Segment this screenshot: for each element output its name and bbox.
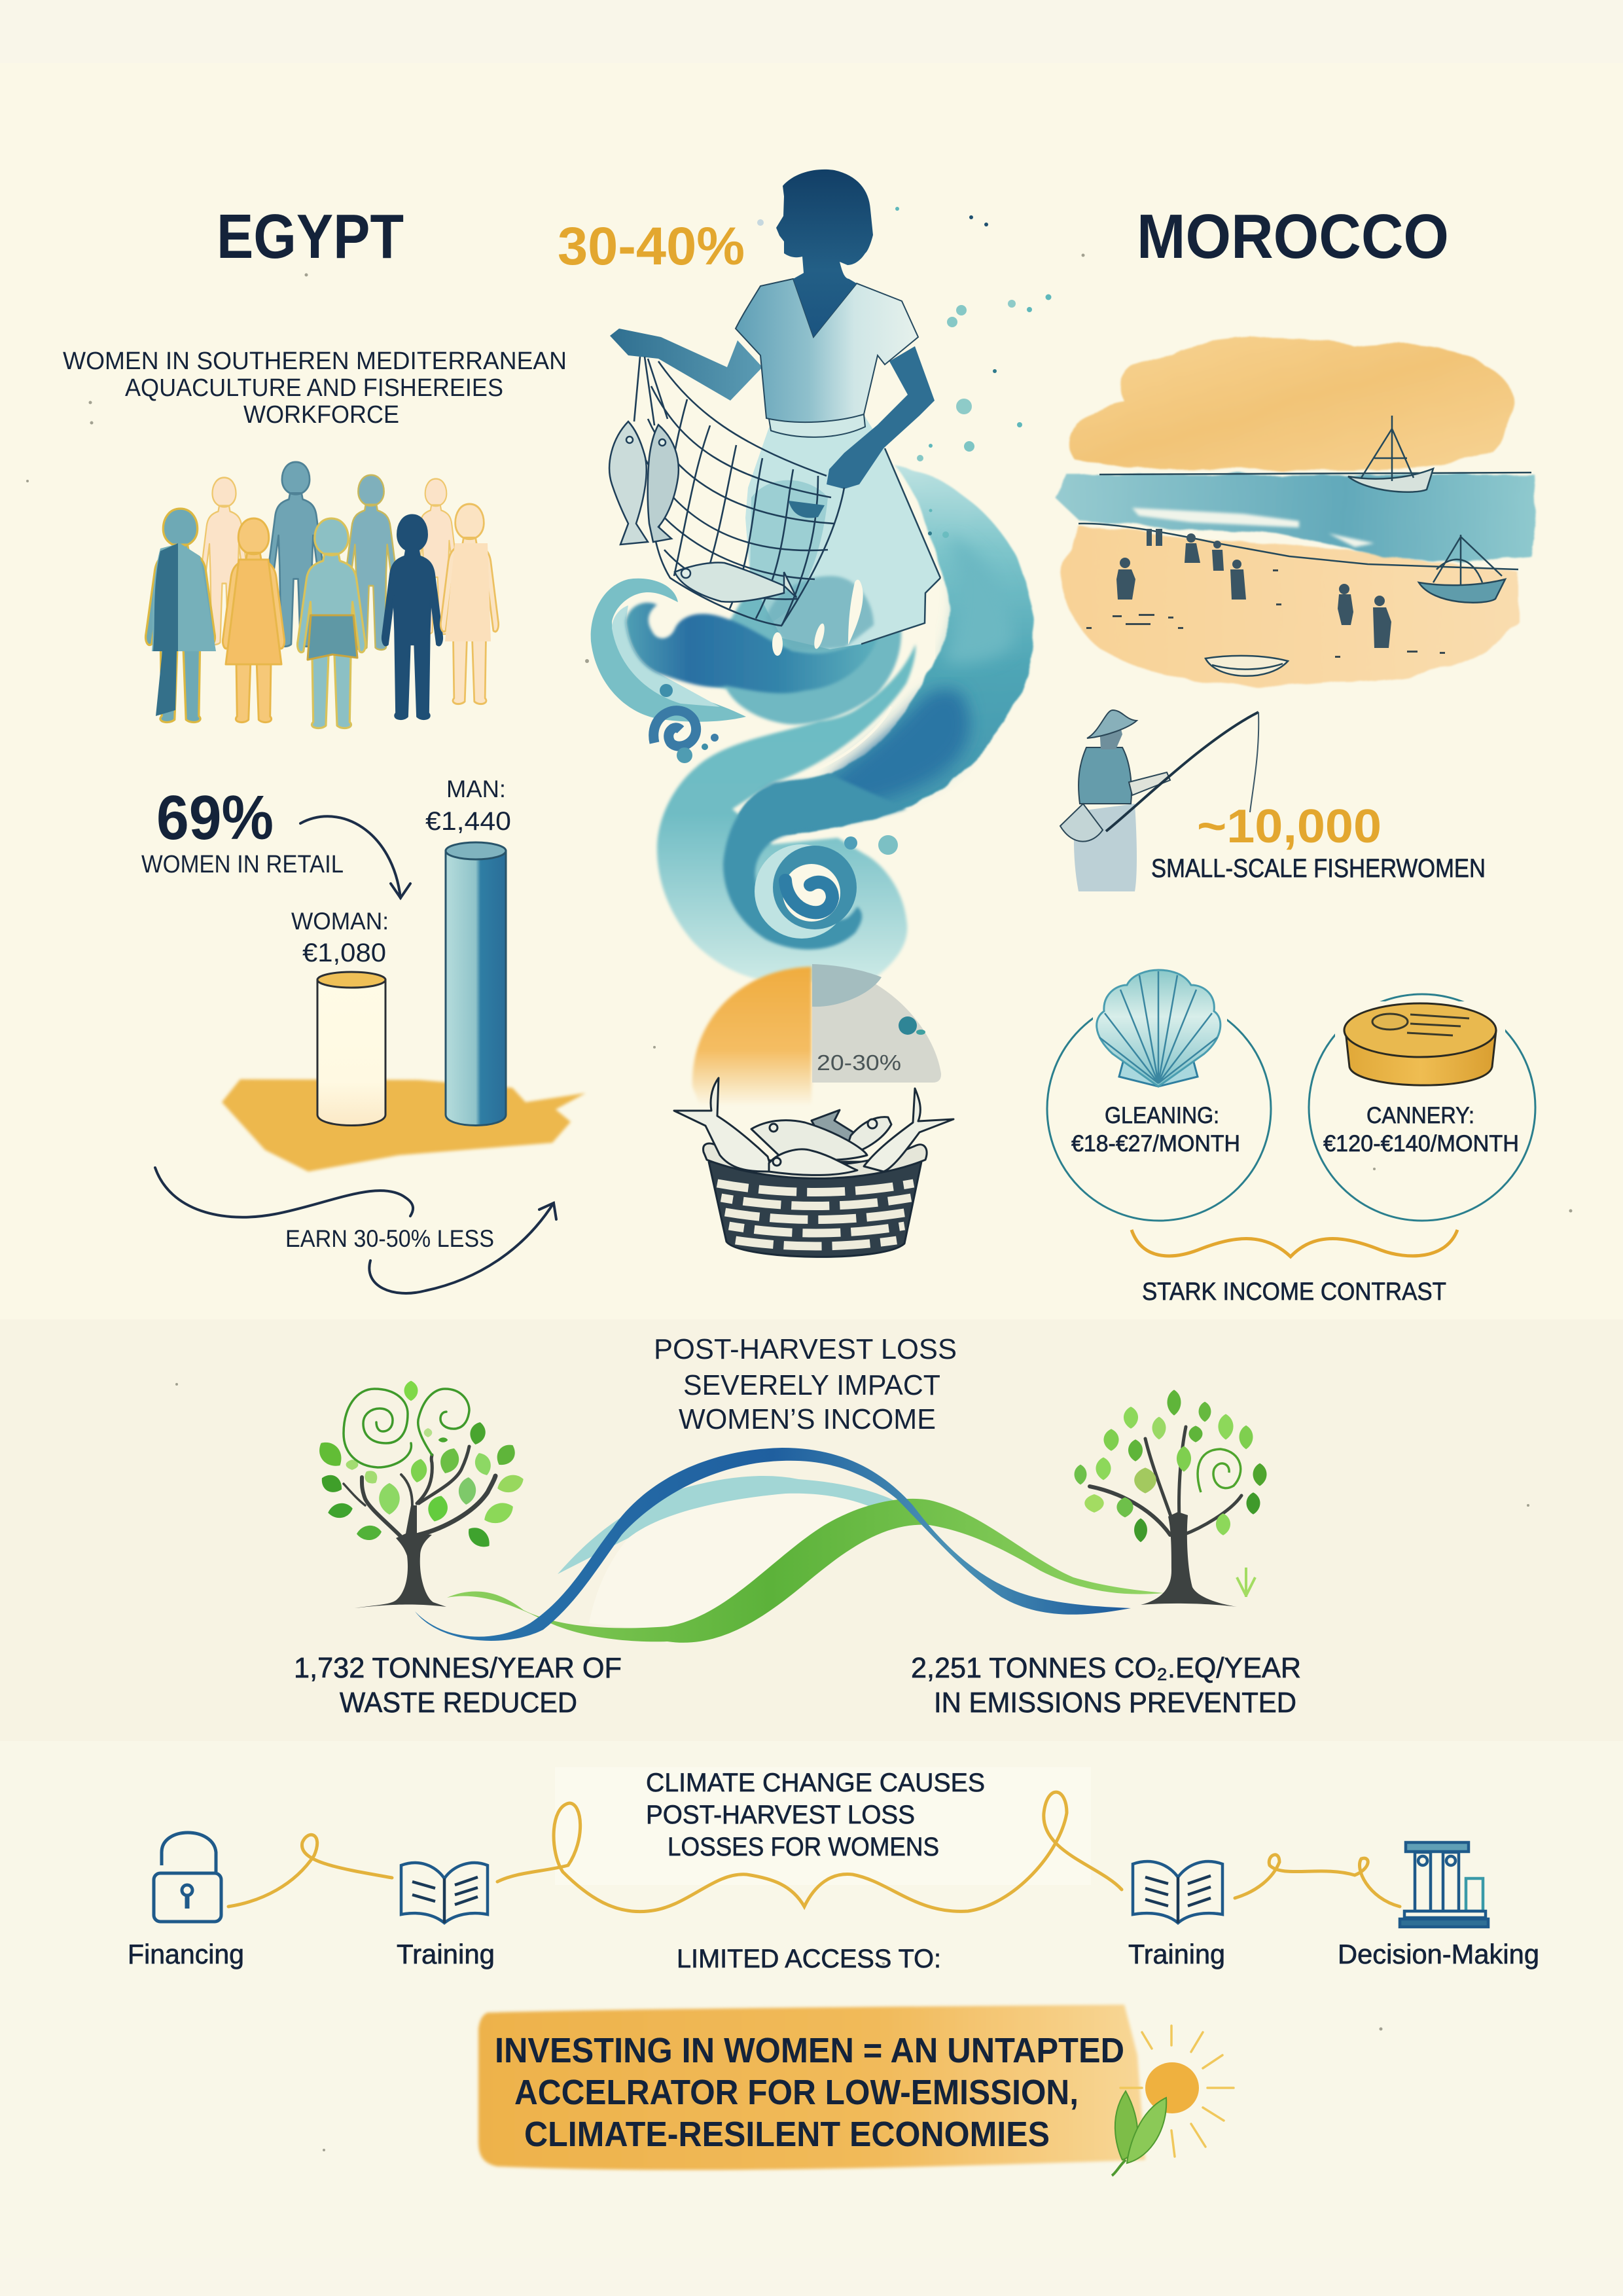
banner: call to action <box>478 2005 1145 2170</box>
arrow: swoosh left <box>155 1168 413 1217</box>
sand dots <box>1086 569 1445 658</box>
banner: call to action: ACCELRATOR FOR LOW-EMISSION, <box>514 2073 1079 2112</box>
text: climate change causes <box>646 1768 985 1861</box>
icon: sardine can <box>1335 1001 1505 1085</box>
panel: cannery income: CANNERY: <box>1366 1103 1474 1128</box>
banner: call to action: INVESTING IN WOMEN = AN UNTAPTED <box>495 2031 1124 2070</box>
beach figures <box>1116 529 1391 648</box>
text: climate change causes: CLIMATE CHANGE CAUSES <box>646 1768 985 1797</box>
boat: beached <box>1419 535 1505 603</box>
right arm <box>827 346 935 489</box>
boat: rowboat <box>1205 656 1288 676</box>
bar: man: MAN: <box>446 776 506 802</box>
bar: man <box>425 776 511 1126</box>
text: climate change causes: POST-HARVEST LOSS <box>646 1801 915 1829</box>
icon: right tree <box>1075 1390 1267 1607</box>
ribbons: waves between trees <box>415 1448 1164 1643</box>
bubbles <box>757 207 1051 538</box>
text: post-harvest loss <box>654 1333 957 1435</box>
wave: right arc <box>723 463 1033 864</box>
text: post-harvest loss: SEVERELY IMPACT <box>683 1369 940 1401</box>
icon: scallop shell <box>1093 970 1227 1086</box>
wave: hook and drops <box>654 684 898 855</box>
icon: left tree <box>313 1381 526 1608</box>
illustration: group of workers <box>146 462 499 728</box>
illustration: swirling water waves <box>591 463 1033 982</box>
panel: cannery income <box>1309 994 1535 1221</box>
text: emissions prevented: IN EMISSIONS PREVENTED <box>934 1687 1296 1719</box>
icon: sun and leaves <box>1112 2026 1234 2176</box>
heading: Morocco: MOROCCO <box>1137 202 1449 272</box>
illustration: fisherwoman with rod <box>1060 710 1258 891</box>
wave: body behind legs <box>694 575 901 725</box>
bar: man: €1,440 <box>425 807 511 836</box>
banner: call to action: CLIMATE-RESILENT ECONOMIES <box>524 2115 1050 2154</box>
statistic: ~10,000 fisherwomen <box>1151 800 1486 883</box>
fish behind <box>751 1110 891 1160</box>
icon: book <box>401 1863 488 1923</box>
text: waste reduced: WASTE REDUCED <box>340 1687 577 1719</box>
statistic: 69% women in retail: WOMEN IN RETAIL <box>141 851 344 878</box>
bar: woman <box>291 908 389 1126</box>
wave: swirl band <box>723 776 906 950</box>
skirt <box>745 417 940 649</box>
icon: book <box>1133 1861 1222 1923</box>
wave: pale slash <box>808 707 891 773</box>
text: post-harvest loss: WOMEN’S INCOME <box>679 1403 936 1435</box>
illustration: basket of fish <box>674 1078 954 1257</box>
text: emissions prevented: 2,251 TONNES CO₂.EQ/YEAR <box>911 1652 1301 1684</box>
arrow: retail to bars <box>300 816 410 898</box>
statistic: 30-40%: 30-40% <box>558 217 745 276</box>
bar chart: wages <box>222 776 586 1172</box>
wave: left curl <box>591 579 746 722</box>
connector: yellow looping line <box>228 1792 1400 1912</box>
text: workforce description: WOMEN IN SOUTHEREN MEDITERRANEAN <box>63 348 567 375</box>
panel: gleaning income <box>1047 970 1271 1221</box>
statistic: 69% women in retail: 69% <box>156 783 274 853</box>
text: workforce description <box>63 348 567 429</box>
pie chart: 20-30%: 20-30% <box>817 1050 901 1075</box>
label: limited access: LIMITED ACCESS TO: <box>677 1945 941 1973</box>
left arm <box>610 329 762 401</box>
statistic: ~10,000 fisherwomen: ~10,000 <box>1197 800 1382 853</box>
brace: income contrast <box>1132 1230 1457 1257</box>
text: post-harvest loss: POST-HARVEST LOSS <box>654 1333 957 1365</box>
text: waste reduced: 1,732 TONNES/YEAR OF <box>294 1652 622 1684</box>
sky wash <box>1069 338 1514 470</box>
icon: classical columns <box>1400 1842 1488 1927</box>
text: workforce description: AQUACULTURE AND FISHEREIES <box>125 374 503 402</box>
text: climate change causes: LOSSES FOR WOMENS <box>668 1833 939 1861</box>
text: emissions prevented <box>911 1652 1301 1719</box>
wave: central spiral <box>755 844 857 939</box>
arrow: swoosh right <box>369 1203 556 1293</box>
label: decision-making: Decision-Making <box>1338 1939 1539 1969</box>
text: stark income contrast: STARK INCOME CONTRAST <box>1142 1278 1446 1306</box>
illustration: Moroccan beach scene <box>1055 338 1537 686</box>
shirt <box>736 279 918 422</box>
paper specks <box>26 254 1572 2151</box>
panel: cannery income: €120-€140/MONTH <box>1323 1131 1519 1157</box>
panel: gleaning income: €18-€27/MONTH <box>1071 1131 1240 1157</box>
net <box>634 357 844 626</box>
boat: sailing <box>1348 416 1433 492</box>
statistic: ~10,000 fisherwomen: SMALL-SCALE FISHERWOMEN <box>1151 854 1486 883</box>
wave: lower S band <box>657 644 916 982</box>
label: training: Training <box>397 1939 495 1969</box>
panel: gleaning income: GLEANING: <box>1105 1103 1219 1128</box>
statistic: 69% women in retail <box>141 783 344 878</box>
bar: woman: €1,080 <box>302 939 386 967</box>
text: waste reduced <box>294 1652 622 1719</box>
fish front <box>674 1078 954 1175</box>
basket body <box>709 1162 921 1257</box>
waistband <box>769 414 865 437</box>
pie chart: 20-30% <box>692 964 941 1106</box>
fish in net <box>609 422 796 602</box>
text: earn less: EARN 30-50% LESS <box>285 1225 494 1252</box>
label: training: Training <box>1128 1939 1225 1969</box>
bar: woman: WOMAN: <box>291 908 389 935</box>
illustration: woman holding a fishing net <box>609 170 940 656</box>
icon: padlock <box>154 1833 221 1922</box>
label: financing: Financing <box>128 1939 244 1969</box>
sand <box>1063 527 1518 686</box>
sea <box>1055 475 1537 562</box>
head <box>776 170 873 337</box>
text: workforce description: WORKFORCE <box>243 401 399 429</box>
wave: deep blue band <box>626 603 880 693</box>
heading: Egypt: EGYPT <box>217 202 404 272</box>
